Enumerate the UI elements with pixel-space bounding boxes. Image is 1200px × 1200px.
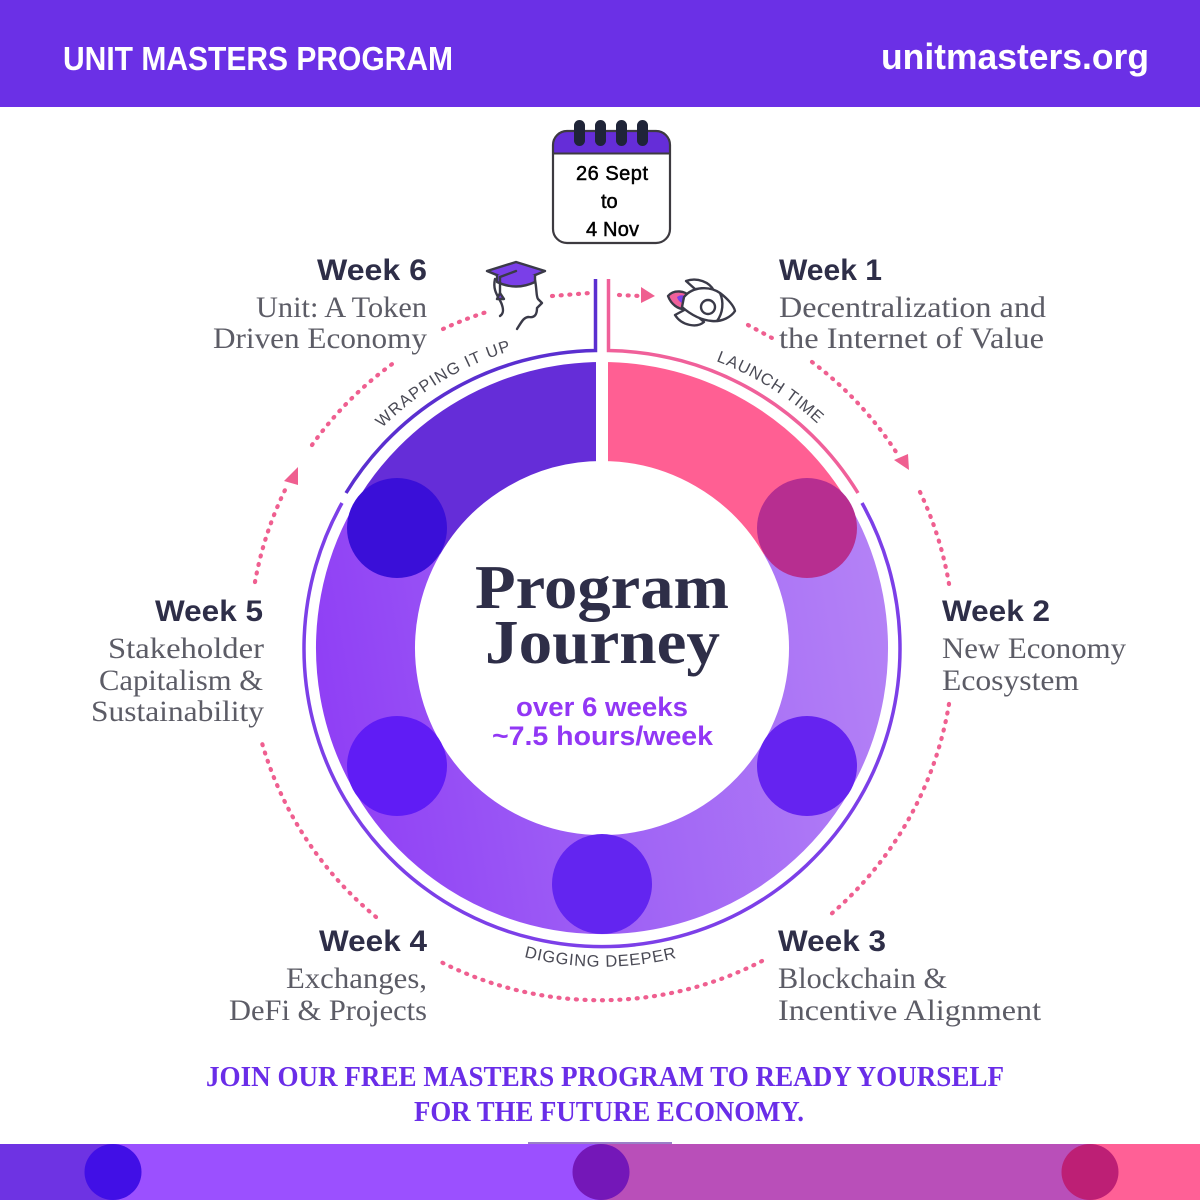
week 2 label: Week 2 <box>942 595 1050 628</box>
center duration <box>492 692 714 751</box>
thin outer rings <box>304 279 900 947</box>
week 6 label: Driven Economy <box>213 322 427 355</box>
icon: rocket <box>668 280 735 325</box>
center title: Program <box>475 554 729 622</box>
calendar icon with dates <box>553 120 670 243</box>
week 5 label: Stakeholder <box>108 632 264 665</box>
week 4 label: Exchanges, <box>286 962 427 995</box>
curved label: digging deeper: DIGGING DEEPER <box>525 946 676 967</box>
week 3 label <box>778 925 1042 1027</box>
week 1 label: Decentralization and <box>779 291 1046 324</box>
week 3 label: Week 3 <box>778 925 886 958</box>
week 3 label: Incentive Alignment <box>778 994 1042 1027</box>
arrow: to week 2 <box>894 454 909 470</box>
dotted journey path with arrows <box>255 287 950 1000</box>
arrow: to week 6 <box>284 467 298 485</box>
week 4 node <box>347 716 447 816</box>
week 5 label <box>91 595 264 728</box>
calendar icon with dates: 4 Nov <box>586 219 639 241</box>
week 1 label <box>779 254 1046 355</box>
week 2 label <box>942 595 1126 697</box>
center duration: ~7.5 hours/week <box>492 721 714 751</box>
segment: weeks 2 to 5 <box>365 530 838 885</box>
call to action: FOR THE FUTURE ECONOMY. <box>414 1097 804 1128</box>
week 5 node <box>347 478 447 578</box>
week 3 node <box>552 834 652 934</box>
center title: Journey <box>485 609 720 677</box>
week 5 label: Sustainability <box>91 695 264 728</box>
curved label: launch time: LAUNCH TIME <box>717 351 824 424</box>
week 5 label: Capitalism & <box>99 664 263 697</box>
center title <box>475 554 729 751</box>
header website: unitmasters.org <box>881 36 1149 77</box>
week 6 label: Week 6 <box>317 254 427 287</box>
week 6 label <box>213 254 427 355</box>
week 3 label: Blockchain & <box>778 962 947 995</box>
week 1 node <box>757 478 857 578</box>
segment: wrapping it up <box>397 412 602 530</box>
calendar icon with dates: to <box>601 191 618 213</box>
week 2 node <box>757 716 857 816</box>
header title: UNIT MASTERS PROGRAM <box>63 40 453 77</box>
calendar icon with dates: 26 Sept <box>576 163 648 185</box>
arrow: to week 1 <box>641 287 655 303</box>
icon: graduate head with cap <box>487 262 545 329</box>
week 4 label: Week 4 <box>319 925 427 958</box>
week 5 label: Week 5 <box>155 595 263 628</box>
call to action: JOIN OUR FREE MASTERS PROGRAM TO READY YOURSELF <box>206 1062 1004 1093</box>
week 4 label <box>229 925 427 1027</box>
week 6 label: Unit: A Token <box>256 291 427 324</box>
week 1 label: the Internet of Value <box>779 322 1044 355</box>
segment: launch time <box>602 412 807 530</box>
center duration: over 6 weeks <box>516 692 688 722</box>
week 1 label: Week 1 <box>779 254 882 287</box>
footer colour band <box>0 1142 1200 1200</box>
call to action <box>206 1062 1004 1128</box>
curved label: wrapping it up: WRAPPING IT UP <box>374 341 508 426</box>
header bar <box>0 0 1200 107</box>
week 2 label: New Economy <box>942 632 1126 665</box>
donut: program journey ring <box>347 355 857 934</box>
week 4 label: DeFi & Projects <box>229 994 427 1027</box>
week 2 label: Ecosystem <box>942 664 1079 697</box>
